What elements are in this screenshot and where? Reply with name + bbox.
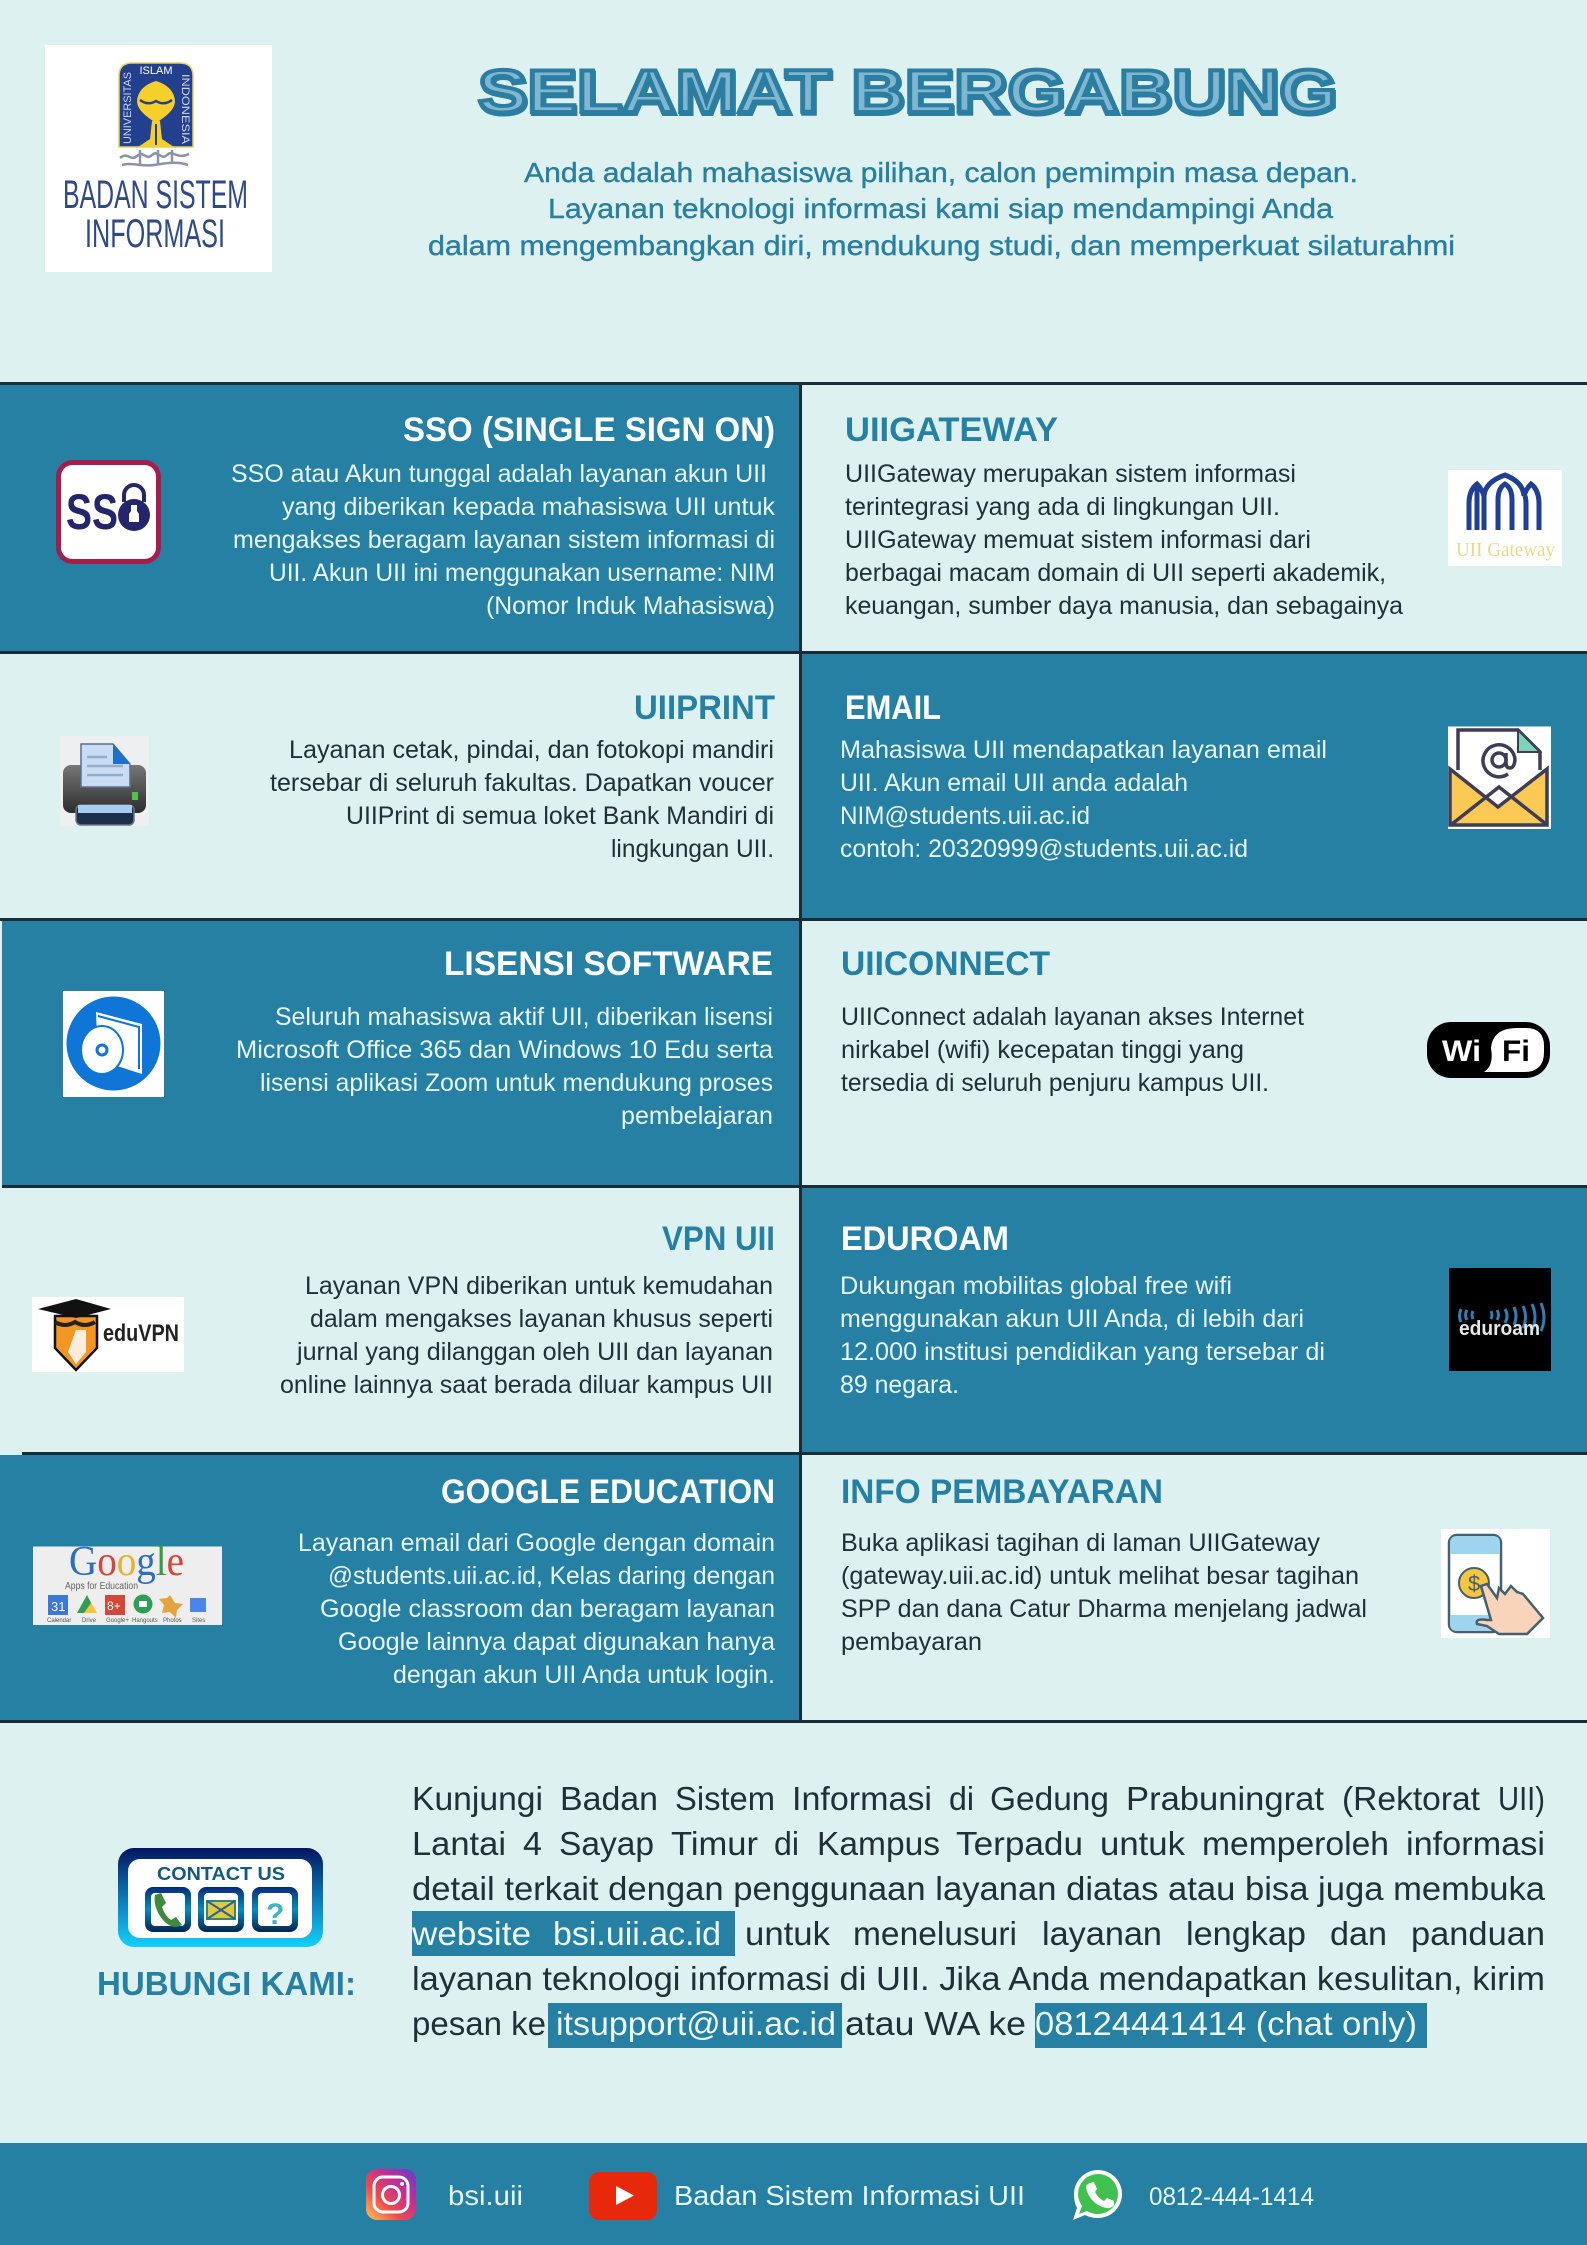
text: Eduroam description: Dukungan mobilitas global free wifi [840, 1272, 1232, 1300]
text: Google description: Layanan email dari Google dengan domain [298, 1529, 775, 1557]
text block: contact information: memperoleh [1202, 1825, 1389, 1862]
icon: UII shield [119, 63, 193, 165]
text block: contact information [411, 1780, 1546, 2048]
panel: UIIGateway [800, 385, 1587, 652]
heading: Lisensi Software: LISENSI SOFTWARE [444, 945, 773, 983]
text: UIIPrint description: UIIPrint di semua loket Bank Mandiri di [346, 802, 774, 830]
text: Google description: Google classroom dan beragam layanan [320, 1595, 775, 1623]
icon: eduVPN [32, 1297, 184, 1372]
text block: contact information: Kunjungi [412, 1780, 543, 1817]
text: Email description: Mahasiswa UII mendapatkan layanan email [840, 736, 1327, 764]
icon: eduVPN: eduVPN [103, 1320, 179, 1347]
text: Info description: (gateway.uii.ac.id) untuk melihat besar tagihan [841, 1562, 1359, 1590]
icon: Google apps: Photos [163, 1618, 182, 1624]
icon: SSO lock: SS [66, 484, 118, 540]
text: SSO description: (Nomor Induk Mahasiswa) [486, 592, 775, 620]
text block: contact information: menelusuri [853, 1915, 1017, 1952]
panel: Info Pembayaran [800, 1455, 1587, 1720]
text: Lisensi description: Microsoft Office 365 dan Windows 10 Edu serta [236, 1036, 773, 1064]
icon: WiFi: Fi [1502, 1035, 1530, 1068]
text: Google description: @students.uii.ac.id, Kelas daring dengan [328, 1562, 775, 1590]
text block: contact information: 4 [523, 1825, 542, 1862]
text: UIIPrint description: lingkungan UII. [611, 835, 774, 863]
text block: contact information: atau WA ke [845, 2005, 1026, 2042]
text block: contact information: Lantai [412, 1825, 506, 1862]
text: UIIGateway description: berbagai macam domain di UII seperti akademik, [845, 559, 1386, 587]
icon: YouTube [589, 2172, 657, 2220]
text: SSO description: mengakses beragam layanan sistem informasi di [233, 526, 775, 554]
text block: contact information: lengkap [1186, 1915, 1306, 1952]
label: YouTube: Badan Sistem Informasi UII [674, 2180, 1025, 2211]
text block: contact information: (Rektorat [1342, 1780, 1480, 1817]
icon: UII shield: INDONESIA [179, 74, 191, 145]
text: UIIGateway description: keuangan, sumber daya manusia, dan sebagainya [845, 592, 1403, 620]
text: VPN description [280, 1272, 773, 1399]
icon: Google apps: Hangouts [132, 1618, 158, 1624]
text: VPN description: jurnal yang dilanggan oleh UII dan layanan [296, 1338, 773, 1366]
text: Email description: NIM@students.uii.ac.id [840, 802, 1090, 830]
text block: contact information: untuk [745, 1915, 831, 1952]
heading: Info Pembayaran: INFO PEMBAYARAN [841, 1473, 1163, 1511]
text block: contact information: Prabuningrat [1126, 1780, 1324, 1817]
text: Info description [841, 1529, 1367, 1656]
text block: contact information: 08124441414 (chat only) [1035, 2005, 1417, 2042]
text: SSO description: yang diberikan kepada mahasiswa UII untuk [282, 493, 775, 521]
text: Eduroam description: menggunakan akun UII Anda, di lebih dari [840, 1305, 1304, 1333]
icon: WiFi: Wi [1442, 1035, 1481, 1068]
text: UIIPrint description [270, 736, 774, 863]
heading: Email: EMAIL [845, 689, 941, 727]
text block: contact information: untuk [1100, 1825, 1186, 1862]
icon: Instagram [366, 2169, 416, 2220]
text: UIIConnect description: nirkabel (wifi) kecepatan tinggi yang [841, 1036, 1244, 1064]
text block: contact information: Sistem [675, 1780, 775, 1817]
text: UIIPrint description: Layanan cetak, pindai, dan fotokopi mandiri [289, 736, 774, 764]
text: Google description: Google lainnya dapat digunakan hanya [338, 1628, 775, 1656]
text: Google description: dengan akun UII Anda untuk login. [393, 1661, 775, 1689]
text: Eduroam description [840, 1272, 1325, 1399]
panel: UIIPrint [0, 654, 800, 919]
text: UIIGateway description: UIIGateway merupakan sistem informasi [845, 460, 1296, 488]
text block: contact information: Badan [560, 1780, 658, 1817]
heading: UIIGateway: UIIGATEWAY [845, 411, 1058, 449]
text: SSO description [231, 460, 775, 620]
icon: Google apps: Calendar [47, 1618, 71, 1624]
text block: contact information: Sayap [559, 1825, 654, 1862]
text: Eduroam description: 89 negara. [840, 1371, 959, 1399]
text: Lisensi description: lisensi aplikasi Zoom untuk mendukung proses [260, 1069, 773, 1097]
text: UIIGateway description: UIIGateway memuat sistem informasi dari [845, 526, 1311, 554]
text: Email description: UII. Akun email UII anda adalah [840, 769, 1188, 797]
text block: contact information: informasi [1406, 1825, 1545, 1862]
panel: UIIConnect [800, 921, 1587, 1185]
text: VPN description: Layanan VPN diberikan untuk kemudahan [305, 1272, 773, 1300]
text block: contact information: website [411, 1915, 531, 1952]
text block: contact information: panduan [1411, 1915, 1545, 1952]
subtitle [428, 157, 1455, 261]
text: SSO description: UII. Akun UII ini menggunakan username: NIM [269, 559, 775, 587]
icon: email envelope [1448, 726, 1551, 829]
heading: UIIConnect: UIICONNECT [841, 945, 1050, 983]
text block: contact information: layanan teknologi informasi di UII. Jika Anda mendapatkan kesulitan, kirim [412, 1960, 1545, 1997]
icon: Google apps: 8+ [107, 1599, 121, 1613]
text: Email description [840, 736, 1327, 863]
text block: contact information: di [949, 1780, 974, 1817]
text block: contact information: dan [1330, 1915, 1387, 1952]
text: UIIPrint description: tersebar di seluruh fakultas. Dapatkan voucer [270, 769, 774, 797]
text: Lisensi description: pembelajaran [621, 1102, 773, 1130]
icon: Google apps: Apps for Education [65, 1581, 138, 1592]
heading: SSO: SSO (SINGLE SIGN ON) [403, 411, 775, 449]
subtitle: Layanan teknologi informasi kami siap mendampingi Anda [548, 193, 1333, 224]
text: VPN description: online lainnya saat berada diluar kampus UII [280, 1371, 773, 1399]
icon: contact us badge: CONTACT US [157, 1864, 285, 1884]
panel: Lisensi Software [2, 921, 800, 1185]
text block: contact information: Informasi [792, 1780, 932, 1817]
text block: contact information: bsi.uii.ac.id [553, 1915, 721, 1952]
text: UIIConnect description: UIIConnect adalah layanan akses Internet [841, 1003, 1304, 1031]
icon: software disc [63, 991, 164, 1097]
text block: contact information: pesan ke [412, 2005, 546, 2042]
icon: eduroam: eduroam [1459, 1318, 1540, 1340]
heading: Hubungi Kami: HUBUNGI KAMI: [97, 1965, 356, 2002]
icon: mobile payment: $ [1468, 1571, 1480, 1596]
icon: UII shield: ISLAM [139, 65, 173, 77]
icon: WiFi [1427, 1022, 1550, 1078]
icon: printer [60, 736, 149, 826]
text: Lisensi description [236, 1003, 773, 1130]
icon: UII Gateway: UII Gateway [1456, 539, 1555, 561]
text block: contact information: UII) [1498, 1780, 1545, 1817]
icon: mobile payment [1441, 1529, 1550, 1638]
text: VPN description: dalam mengakses layanan khusus seperti [310, 1305, 773, 1333]
panel: SSO [0, 385, 800, 652]
text: SSO description: SSO atau Akun tunggal adalah layanan akun UII [231, 460, 767, 488]
text: Email description: contoh: 20320999@students.uii.ac.id [840, 835, 1248, 863]
text block: contact information: di [774, 1825, 799, 1862]
icon: UII shield: UNIVERSITAS [122, 72, 134, 144]
panel: Email [800, 654, 1587, 919]
text block: contact information: detail terkait dengan penggunaan layanan diatas atau bisa juga membuka [412, 1870, 1546, 1907]
text: Lisensi description: Seluruh mahasiswa aktif UII, diberikan lisensi [275, 1003, 773, 1031]
heading: Eduroam: EDUROAM [841, 1220, 1009, 1258]
text: UIIGateway description: terintegrasi yang ada di lingkungan UII. [845, 493, 1280, 521]
text block: contact information: layanan [1042, 1915, 1162, 1952]
icon: Google apps: 31 [51, 1599, 65, 1614]
text: Google description [298, 1529, 775, 1689]
text block: contact information: Gedung [990, 1780, 1109, 1817]
text block: contact information: Kampus [817, 1825, 940, 1862]
panel: Google Education [0, 1455, 800, 1720]
heading: VPN UII: VPN UII [662, 1220, 775, 1258]
label: WhatsApp: 0812-444-1414 [1149, 2183, 1314, 2211]
title: SELAMAT BERGABUNG [478, 58, 1337, 125]
text: UIIGateway description [845, 460, 1403, 620]
subtitle: dalam mengembangkan diri, mendukung studi, dan memperkuat silaturahmi [428, 230, 1455, 261]
text: UIIConnect description: tersedia di seluruh penjuru kampus UII. [841, 1069, 1269, 1097]
footer bar [0, 2143, 1587, 2245]
icon: Google apps: Google [69, 1539, 184, 1585]
panel: VPN UII [0, 1188, 800, 1452]
icon: Google apps: Google+ [106, 1618, 129, 1624]
icon: eduroam [1449, 1268, 1551, 1371]
icon: Google apps: Drive [82, 1618, 97, 1624]
text: Info description: pembayaran [841, 1628, 982, 1656]
icon: WhatsApp [1073, 2170, 1122, 2220]
label: Instagram: bsi.uii [448, 2180, 523, 2211]
text: Info description: Buka aplikasi tagihan di laman UIIGateway [841, 1529, 1320, 1557]
icon: Google apps: Sites [192, 1618, 205, 1624]
text: Eduroam description: 12.000 institusi pendidikan yang tersebar di [840, 1338, 1325, 1366]
text block: contact information: itsupport@uii.ac.id [556, 2005, 836, 2042]
subtitle: Anda adalah mahasiswa pilihan, calon pemimpin masa depan. [524, 157, 1358, 188]
icon: Google apps [33, 1539, 222, 1625]
icon: contact us badge: ? [266, 1898, 284, 1931]
wordmark line 2: INFORMASI [85, 212, 225, 256]
icon: contact us badge [118, 1848, 323, 1947]
icon: SSO lock [58, 462, 158, 562]
wordmark line 1: BADAN SISTEM [63, 173, 248, 217]
heading: UIIPrint: UIIPRINT [634, 689, 775, 727]
divider lines [0, 382, 1587, 1723]
text block: contact information: Terpadu [956, 1825, 1083, 1862]
panel: Eduroam [800, 1188, 1587, 1452]
logo: Badan Sistem Informasi [45, 45, 272, 272]
text: UIIConnect description [841, 1003, 1304, 1097]
text block: contact information: Timur [671, 1825, 758, 1862]
text: Info description: SPP dan dana Catur Dharma menjelang jadwal [841, 1595, 1367, 1623]
heading: Google Education: GOOGLE EDUCATION [441, 1473, 775, 1511]
icon: UII Gateway [1448, 470, 1562, 566]
